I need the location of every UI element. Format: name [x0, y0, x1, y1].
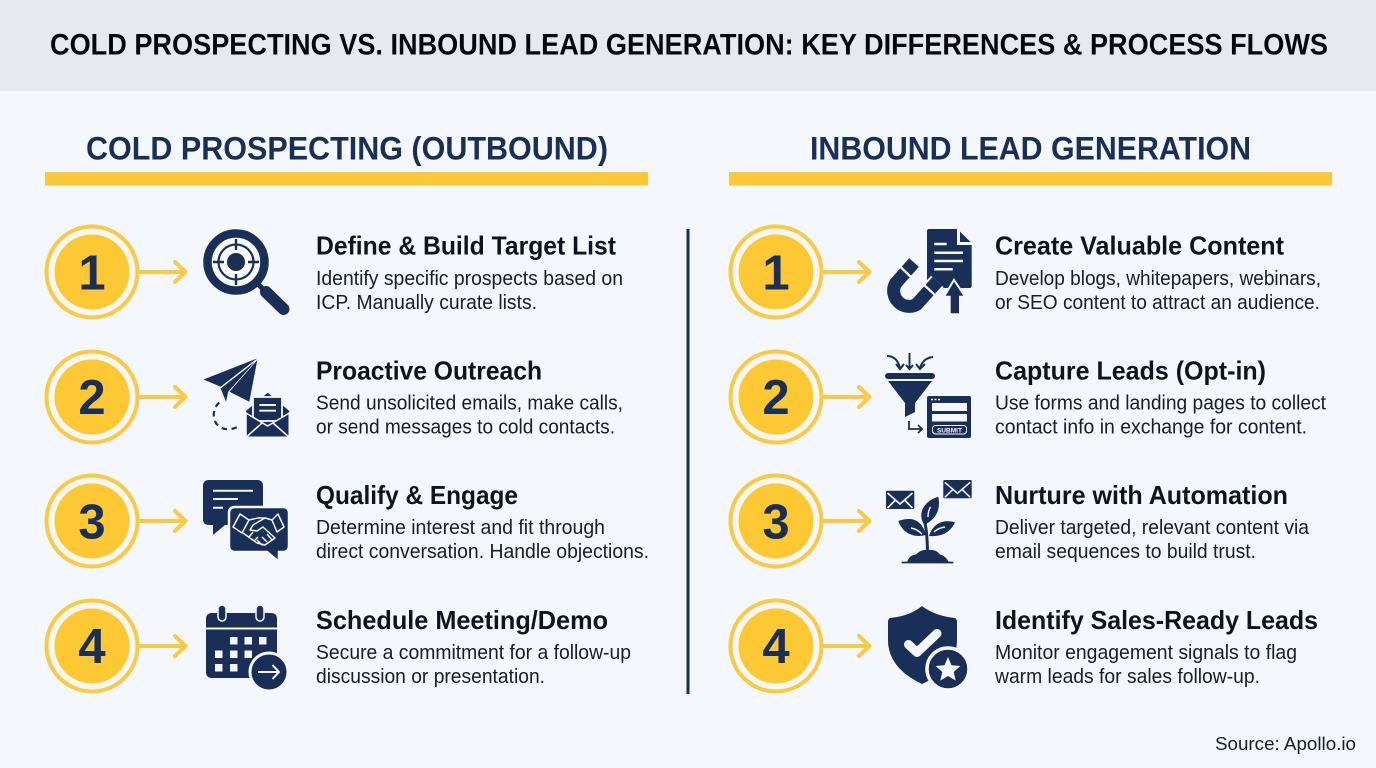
step text: discussion or presentation.	[316, 665, 545, 688]
number badge 1	[730, 226, 870, 318]
number badge 1	[46, 226, 186, 318]
step text: Proactive Outreach	[316, 356, 542, 386]
right step 4	[730, 600, 1318, 692]
step text: Develop blogs, whitepapers, webinars,	[995, 267, 1321, 290]
step text	[316, 480, 649, 563]
step text: Send unsolicited emails, make calls,	[316, 392, 623, 414]
left step 4	[46, 600, 631, 692]
step text: Create Valuable Content	[995, 230, 1284, 260]
number badge 1: 1	[762, 246, 790, 300]
number badge 2	[46, 352, 186, 442]
step text: email sequences to build trust.	[995, 540, 1256, 563]
step text: Nurture with Automation	[995, 480, 1288, 510]
icon: paper plane and envelope	[204, 358, 289, 437]
icon: calendar with arrow	[206, 605, 288, 691]
right step 2	[730, 352, 1326, 442]
icon: funnel and form: SUBMIT	[937, 428, 962, 434]
left step 2	[46, 352, 623, 442]
step text: Secure a commitment for a follow-up	[316, 641, 631, 664]
number badge 4	[46, 600, 186, 692]
heading: inbound lead generation: INBOUND LEAD GENERATION	[810, 130, 1251, 166]
step text: Determine interest and fit through	[316, 516, 605, 539]
step text	[994, 605, 1318, 688]
number badge 2: 2	[78, 371, 106, 425]
number badge 2	[730, 352, 870, 442]
step text: Schedule Meeting/Demo	[316, 605, 608, 635]
center divider	[686, 229, 690, 694]
left step 3	[46, 476, 649, 566]
number badge 3: 3	[78, 496, 106, 550]
step text: or send messages to cold contacts.	[316, 416, 615, 438]
number badge 2: 2	[762, 371, 790, 425]
number badge 3	[730, 476, 870, 566]
heading: cold prospecting	[45, 130, 648, 186]
step text: or SEO content to attract an audience.	[995, 291, 1320, 314]
step text: Deliver targeted, relevant content via	[995, 516, 1310, 539]
step text	[316, 230, 623, 314]
number badge 4: 4	[78, 620, 106, 674]
number badge 4: 4	[762, 620, 790, 674]
step text: direct conversation. Handle objections.	[316, 540, 649, 563]
step text: Identify Sales-Ready Leads	[995, 605, 1318, 635]
right step 3	[730, 476, 1310, 566]
number badge 3: 3	[762, 496, 790, 550]
step text: warm leads for sales follow-up.	[994, 665, 1260, 688]
step text: Capture Leads (Opt-in)	[995, 356, 1266, 386]
icon: target magnifier	[208, 234, 284, 309]
right step 1	[730, 226, 1321, 318]
step text: Use forms and landing pages to collect	[995, 392, 1326, 414]
title banner	[0, 0, 1376, 91]
step text: Identify specific prospects based on	[316, 267, 623, 290]
icon: funnel and form	[885, 353, 971, 438]
step text: contact info in exchange for content.	[995, 416, 1307, 438]
step text: ICP. Manually curate lists.	[316, 291, 537, 314]
heading: cold prospecting: COLD PROSPECTING (OUTBOUND)	[86, 130, 608, 166]
heading: inbound lead generation	[729, 130, 1332, 186]
step text	[995, 480, 1310, 563]
number badge 3	[46, 476, 186, 566]
step text	[316, 605, 631, 688]
icon: magnet and document	[894, 229, 972, 313]
step text: Define & Build Target List	[316, 230, 616, 260]
step text: Monitor engagement signals to flag	[995, 641, 1297, 664]
source note: Source: Apollo.io	[1215, 733, 1356, 754]
step text	[316, 356, 623, 438]
step text	[995, 356, 1326, 438]
left step 1	[46, 226, 623, 318]
icon: chat bubbles with handshake	[203, 480, 289, 562]
number badge 4	[730, 600, 870, 692]
step text	[995, 230, 1321, 314]
number badge 1: 1	[78, 246, 106, 300]
icon: plant with envelopes	[886, 480, 972, 562]
step text: Qualify & Engage	[316, 480, 518, 510]
icon: shield with check and star	[888, 606, 969, 690]
